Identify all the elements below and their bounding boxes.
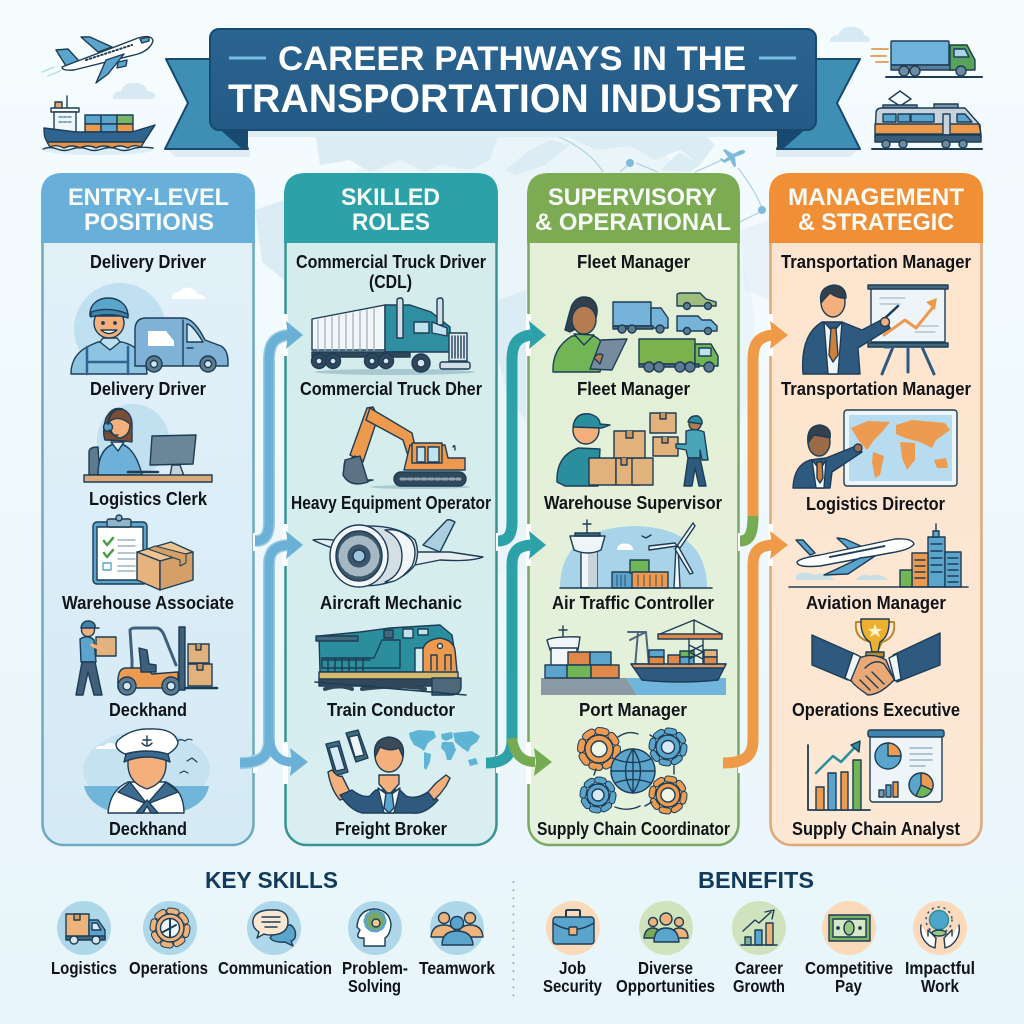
- panel: supervisory and operational: [527, 173, 740, 845]
- role label: Delivery Driver: [90, 252, 206, 272]
- banner shadow: [168, 131, 858, 157]
- heading: benefits: BENEFITS: [698, 867, 814, 893]
- banner fold left: [209, 120, 248, 149]
- role label: Commercial Truck Dher: [300, 379, 482, 399]
- world map backdrop: [255, 105, 770, 575]
- heading: ENTRY-LEVEL: [68, 184, 229, 211]
- label: [543, 958, 602, 996]
- label: [905, 958, 975, 996]
- role label: Train Conductor: [327, 700, 455, 720]
- label: Security: [543, 976, 602, 996]
- benefit: impactful work: [905, 901, 975, 996]
- icon: excavator: [343, 407, 470, 489]
- heading: SUPERVISORY: [548, 184, 717, 211]
- role label: Commercial Truck Driver: [296, 252, 486, 272]
- label: Opportunities: [616, 976, 715, 996]
- panel body: [42, 175, 254, 845]
- role label: Transportation Manager: [781, 252, 971, 272]
- role label: Deckhand: [109, 819, 187, 839]
- role label: Port Manager: [579, 700, 687, 720]
- role label: Warehouse Supervisor: [544, 493, 722, 513]
- title line 2: TRANSPORTATION INDUSTRY: [228, 77, 799, 121]
- label: [342, 958, 408, 996]
- benefit: diverse opportunities: [616, 901, 715, 996]
- role label: Aircraft Mechanic: [320, 593, 462, 613]
- heading: [341, 184, 440, 236]
- icon: deckhand sailor: [83, 729, 210, 813]
- heading: MANAGEMENT: [788, 184, 964, 211]
- panel body: [528, 175, 738, 845]
- label: Problem-: [342, 958, 408, 978]
- label: Solving: [348, 976, 401, 996]
- heading: & STRATEGIC: [798, 209, 954, 236]
- role label: Supply Chain Coordinator: [537, 819, 730, 839]
- label: [733, 958, 785, 996]
- label: Career: [735, 958, 783, 978]
- icon: growth chart: [732, 901, 786, 955]
- icon: head with brain: [348, 901, 402, 955]
- icon: delivery truck top right: [871, 41, 982, 77]
- role label: Air Traffic Controller: [552, 593, 714, 613]
- icon: fleet manager with tablet and trucks: [553, 293, 718, 372]
- role label: Logistics Clerk: [89, 489, 208, 509]
- icon: supply chain gears and globe: [581, 731, 684, 811]
- skill: teamwork: [419, 901, 495, 978]
- icon: team of three: [430, 901, 484, 955]
- role label: Fleet Manager: [577, 252, 690, 272]
- icon: diesel locomotive: [315, 625, 466, 695]
- icon: briefcase: [546, 901, 600, 955]
- icon: electric train top right: [872, 91, 982, 149]
- panel header: [284, 173, 498, 243]
- heading: POSITIONS: [84, 209, 214, 236]
- icon: small map airplane: [720, 149, 745, 167]
- heading: [788, 184, 964, 236]
- label: Competitive: [805, 958, 893, 978]
- role label: Logistics Director: [806, 494, 945, 514]
- role label: Warehouse Associate: [62, 593, 234, 613]
- arrows: supervisory to management: [723, 314, 788, 773]
- role label: [296, 252, 486, 292]
- role label: Heavy Equipment Operator: [291, 493, 491, 513]
- label: Work: [921, 976, 959, 996]
- icon: air traffic control tower scene: [560, 520, 712, 588]
- heading: & OPERATIONAL: [535, 209, 731, 236]
- label: Pay: [835, 976, 862, 996]
- skill: logistics: [51, 901, 117, 978]
- label: Operations: [129, 958, 208, 978]
- banner right tail: [777, 59, 860, 149]
- panel header: [769, 173, 983, 243]
- heading: SKILLED: [341, 184, 440, 211]
- icon: manager presenting chart: [803, 285, 948, 374]
- icon: delivery driver with van: [71, 283, 228, 375]
- icon: cloud right: [830, 27, 870, 42]
- icon: diverse people: [639, 901, 693, 955]
- title line 1: CAREER PATHWAYS IN THE: [278, 40, 746, 78]
- icon: cloud left: [113, 83, 155, 99]
- icon: warehouse supervisor with boxes: [557, 413, 708, 486]
- label: Diverse: [638, 958, 693, 978]
- heading: [68, 184, 229, 236]
- role label: Supply Chain Analyst: [792, 819, 960, 839]
- icon: banknote: [822, 901, 876, 955]
- icon: operations gear: [143, 901, 197, 955]
- panel header: [41, 173, 255, 243]
- label: Growth: [733, 976, 785, 996]
- icon: handshake with trophy: [812, 619, 940, 695]
- heading: [535, 184, 731, 236]
- benefit: competitive pay: [805, 901, 893, 996]
- icon: container ship: [43, 96, 155, 155]
- icon: commercial semi truck: [312, 298, 475, 375]
- role label: Freight Broker: [335, 819, 447, 839]
- icon: jet engine and wing: [313, 520, 483, 587]
- arrows: skilled to supervisory: [486, 314, 552, 784]
- dotted divider: [512, 882, 514, 996]
- banner fold right: [777, 120, 816, 149]
- icon: worker and forklift: [76, 621, 217, 695]
- label: [616, 958, 715, 996]
- heading: key skills: KEY SKILLS: [205, 867, 338, 893]
- icon: airplane top left: [42, 37, 153, 83]
- panel body: [286, 175, 496, 845]
- label: Communication: [218, 958, 332, 978]
- icon: clipboard and parcel: [93, 515, 193, 590]
- icon: speech bubbles: [247, 901, 301, 955]
- label: Impactful: [905, 958, 975, 978]
- panel: management and strategic: [769, 173, 983, 845]
- skill: problem solving: [342, 901, 408, 996]
- role label: Aviation Manager: [806, 593, 946, 613]
- label: Job: [559, 958, 586, 978]
- icon: airplane and city buildings: [789, 524, 968, 587]
- skill: communication: [218, 901, 332, 978]
- role label: Delivery Driver: [90, 379, 206, 399]
- icon: hands holding globe: [913, 901, 967, 955]
- arrows: entry-level to skilled: [240, 314, 308, 784]
- banner left tail: [165, 59, 248, 149]
- panel header: [527, 173, 740, 243]
- icon: logistics director with world map: [793, 410, 957, 488]
- icon: logistics truck: [57, 901, 111, 955]
- banner main ribbon: [210, 29, 816, 130]
- benefit: career growth: [732, 901, 786, 996]
- role label: Operations Executive: [792, 700, 960, 720]
- icon: supply chain analyst charts: [808, 730, 944, 810]
- skill: operations: [129, 901, 208, 978]
- role label: (CDL): [369, 272, 412, 292]
- label: Teamwork: [419, 958, 495, 978]
- heading: ROLES: [352, 209, 430, 236]
- role label: Fleet Manager: [577, 379, 690, 399]
- role label: Transportation Manager: [781, 379, 971, 399]
- benefit: job security: [543, 901, 602, 996]
- icon: freight broker with phones and map: [326, 730, 480, 813]
- label: Logistics: [51, 958, 117, 978]
- icon: logistics clerk at computer: [84, 404, 212, 482]
- panel: entry-level positions: [41, 173, 255, 845]
- panel body: [770, 175, 982, 845]
- route lines on map: [555, 135, 766, 222]
- role label: Deckhand: [109, 700, 187, 720]
- panel: skilled roles: [284, 173, 498, 845]
- title line accents: [229, 56, 796, 60]
- title banner: [165, 29, 860, 149]
- icon: port with ships and crane: [541, 620, 726, 695]
- label: [805, 958, 893, 996]
